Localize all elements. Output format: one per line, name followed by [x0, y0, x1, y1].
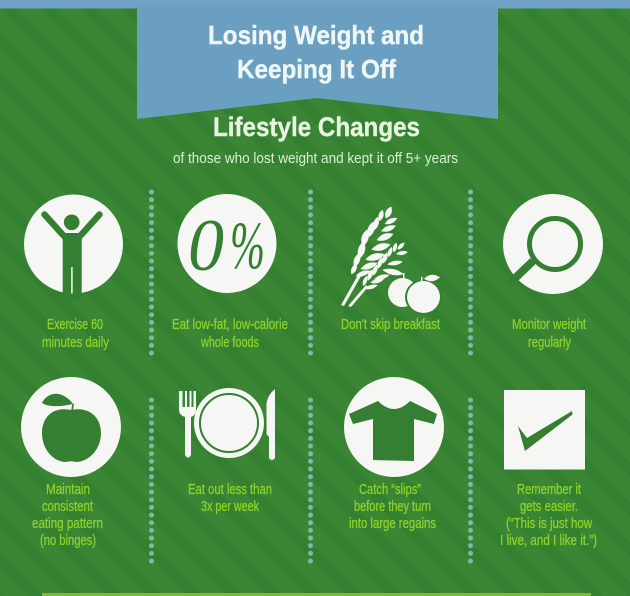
title: [208, 20, 424, 84]
label: consistent eating: [32, 481, 103, 549]
label: eat out: [188, 481, 272, 515]
label: exercise: minutes daily: [42, 334, 109, 351]
title: Keeping It Off: [237, 54, 396, 84]
label: consistent eating: Maintain: [46, 481, 90, 498]
label: low-fat: Eat low-fat, low-calorie: [172, 316, 288, 333]
icon: fork, plate and knife: [179, 388, 275, 460]
blue title banner: [137, 5, 498, 119]
label: low-fat: [172, 316, 288, 351]
label: consistent eating: eating pattern: [32, 515, 103, 532]
icon: exercise figure: [24, 194, 123, 301]
label: catch slips: into large regains: [349, 515, 436, 532]
icon: zero percent: 0: [188, 205, 224, 287]
subtitle: of those who lost weight and kept it off 5+ years: [173, 151, 458, 167]
top blue bar: [0, 0, 630, 8]
label: monitor weight: Monitor weight: [512, 316, 587, 333]
label: exercise: Exercise 60: [47, 316, 103, 333]
label: remember: Remember it: [517, 481, 582, 498]
label: catch slips: Catch “slips”: [359, 481, 421, 498]
label: remember: [500, 481, 597, 549]
label: exercise: [42, 316, 109, 351]
label: monitor weight: [512, 316, 587, 351]
label: breakfast: Don't skip breakfast: [341, 316, 441, 333]
icon: t-shirt: [344, 377, 444, 477]
label: remember: I live, and I like it.”): [500, 532, 597, 549]
icon: check box: [504, 390, 585, 470]
label: monitor weight: regularly: [528, 334, 571, 351]
label: consistent eating: (no binges): [40, 532, 96, 549]
label: consistent eating: consistent: [42, 498, 94, 515]
icon: zero percent: [178, 194, 276, 293]
bottom bar: [42, 593, 591, 596]
icon: zero percent: %: [230, 207, 265, 283]
label: low-fat: whole foods: [200, 334, 259, 351]
icon: magnifying glass: [503, 194, 603, 294]
label: catch slips: before they turn: [354, 498, 431, 515]
label: eat out: Eat out less than: [188, 481, 272, 498]
icon: wheat and apples: [341, 205, 442, 314]
label: eat out: 3x per week: [201, 498, 259, 515]
icon: apple: [21, 377, 121, 477]
label: remember: (“This is just how: [506, 515, 592, 532]
dotted dividers: [152, 192, 470, 565]
label: remember: gets easier.: [520, 498, 578, 515]
label: catch slips: [349, 481, 436, 532]
title: Losing Weight and: [208, 20, 424, 50]
heading: lifestyle changes: Lifestyle Changes: [213, 112, 420, 142]
